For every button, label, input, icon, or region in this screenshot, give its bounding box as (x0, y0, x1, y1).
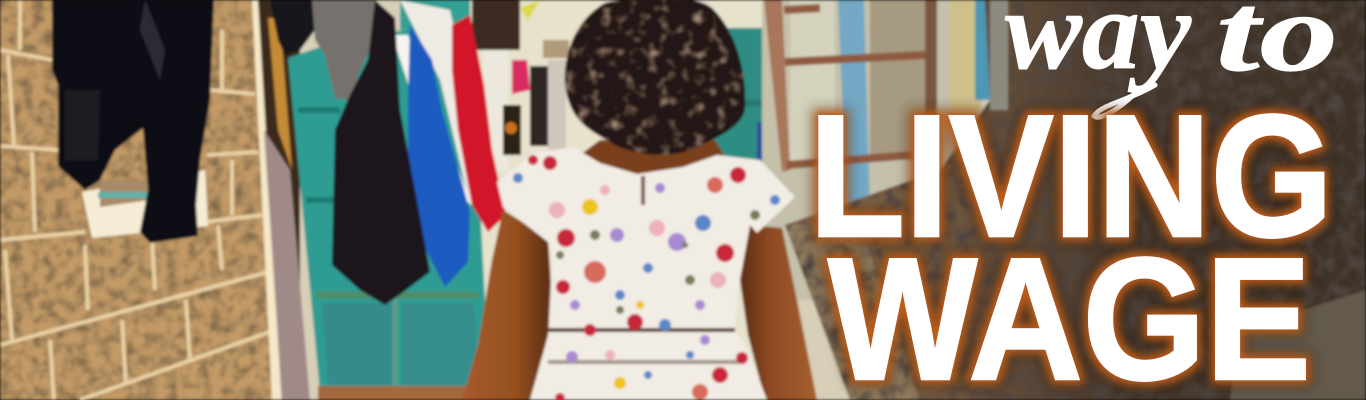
neck (580, 140, 730, 180)
woman seen from behind (462, 0, 817, 400)
white cloth (392, 35, 472, 205)
floral dress (497, 147, 795, 400)
laundry on the line (270, 0, 506, 305)
right window frames and wall (762, 0, 990, 300)
dark top at line start (270, 0, 318, 55)
curly hair (565, 0, 745, 155)
alley gap and orange plank (258, 0, 310, 400)
grey shirt (312, 0, 375, 100)
title (809, 0, 1338, 400)
white post at wall corner (252, 0, 281, 400)
script swash: y tail (1094, 85, 1155, 117)
black trousers (52, 0, 214, 243)
blue garment (408, 25, 470, 287)
left arm (462, 210, 552, 400)
far teal door (705, 28, 769, 166)
left stone wall (0, 0, 278, 400)
teal door (288, 0, 490, 400)
window behind trousers (82, 170, 208, 238)
LIVING WAGE with orange glow (809, 78, 1333, 400)
alley end: pale sky and far walls (470, 0, 770, 400)
dress waist band (548, 328, 735, 332)
dress zip (641, 176, 645, 205)
script line: way to (1005, 0, 1338, 117)
black dress (332, 0, 430, 305)
flower print (513, 155, 780, 400)
right arm (740, 225, 817, 400)
red shirt (452, 15, 506, 232)
right stone wall, dark (785, 0, 1366, 400)
